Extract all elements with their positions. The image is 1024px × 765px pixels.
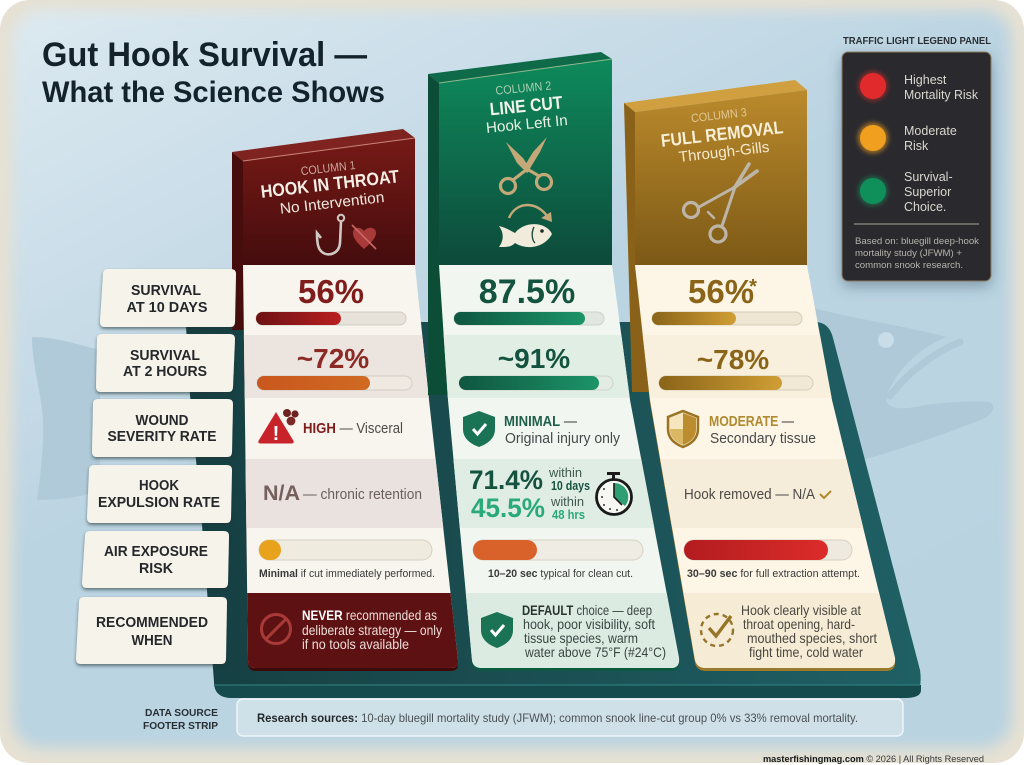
label: survival at 10 days: SURVIVAL — [131, 283, 201, 299]
icon: warning triangle with organs: ! — [273, 423, 279, 445]
icon: scissors — [500, 137, 552, 194]
label: air exposure risk — [82, 531, 229, 588]
hook expulsion: N/A: N/A — [263, 482, 300, 505]
label: wound severity rate — [92, 399, 233, 457]
icon: arrow over fish — [499, 205, 552, 247]
light: green: Choice. — [904, 200, 946, 214]
survival 2 hours: 78%: ~78% — [697, 344, 769, 375]
icon: stopwatch — [596, 472, 632, 514]
label: wound severity rate: WOUND — [136, 413, 188, 429]
wound severity: minimal — [463, 411, 620, 447]
recommended: visible hook — [701, 602, 877, 660]
survival 2 hours: 78% — [659, 344, 813, 390]
wound severity: moderate: MODERATE — — [709, 413, 794, 430]
footer strip label: FOOTER STRIP — [143, 720, 218, 732]
title: What the Science Shows — [42, 76, 385, 109]
hook expulsion: N/A: — chronic retention — [303, 486, 422, 503]
air exposure: 30-90 sec — [684, 540, 860, 580]
background fish tail — [32, 337, 100, 500]
label: hook expulsion rate — [87, 465, 232, 523]
row labels — [76, 269, 236, 664]
hook expulsion: rates: within — [548, 466, 582, 480]
air exposure: minimal: Minimal if cut immediately performed. — [259, 568, 435, 580]
wound severity: high — [259, 409, 403, 445]
footer strip label: DATA SOURCE — [145, 707, 218, 719]
label: recommended when: WHEN — [132, 633, 172, 649]
survival 10 days: 56%: 56% — [298, 273, 364, 310]
light: green: Survival- — [904, 170, 953, 184]
icon: dashed circle check — [701, 614, 733, 646]
column 1 header block: COLUMN 1 — [300, 158, 356, 178]
icon: green shield check — [481, 612, 513, 648]
panel: column 3 full removal — [624, 80, 910, 671]
column 2 body cells — [430, 265, 690, 671]
icon: fish hook with crossed heart — [317, 215, 376, 254]
label: survival at 2 hours — [96, 334, 235, 392]
hook expulsion: N/A — [263, 482, 422, 505]
column 3 body cells — [630, 265, 910, 671]
survival 2 hours: 91%: ~91% — [498, 343, 570, 374]
column 3 header block: Through-Gills — [678, 139, 770, 166]
copyright: masterfishingmag.com © 2026 | All Rights Reserved — [763, 754, 984, 765]
legend note: common snook research. — [855, 260, 963, 271]
hook expulsion: rates: 45.5% — [471, 493, 545, 523]
recommended: default: DEFAULT choice — deep — [522, 602, 652, 618]
label: survival at 2 hours: SURVIVAL — [130, 348, 200, 364]
hook expulsion: rates — [469, 465, 632, 523]
panel: traffic light legend — [842, 52, 991, 281]
light: red: Mortality Risk — [904, 88, 979, 102]
recommended: default: hook, poor visibility, soft — [523, 616, 655, 632]
column 1 body cells — [240, 265, 470, 671]
label: wound severity rate: SEVERITY RATE — [108, 429, 217, 445]
recommended: visible hook: fight time, cold water — [749, 644, 863, 660]
recommended: default — [481, 602, 666, 660]
survival 10 days: 56%*: 56% — [688, 273, 754, 310]
recommended: never: if no tools available — [302, 636, 409, 652]
column 2 header block: Hook Left In — [485, 112, 568, 137]
column 1 header block: No Intervention — [279, 189, 385, 218]
recommended: never: NEVER recommended as — [302, 607, 437, 623]
panel: column 2 line cut — [428, 52, 690, 671]
light: red: Highest — [904, 73, 947, 87]
label: survival at 10 days — [100, 269, 236, 327]
wound severity: minimal: Original injury only — [505, 430, 620, 447]
hook expulsion: rates: within — [550, 495, 584, 509]
label: survival at 10 days: AT 10 DAYS — [126, 300, 208, 316]
label: hook expulsion rate: EXPULSION RATE — [98, 495, 220, 511]
label: hook expulsion rate: HOOK — [139, 478, 179, 494]
air exposure: minimal — [259, 540, 435, 580]
survival 2 hours: 91% — [459, 343, 613, 390]
legend note: Based on: bluegill deep-hook — [855, 236, 979, 247]
recommended: visible hook: Hook clearly visible at — [741, 602, 861, 618]
label: recommended when: RECOMMENDED — [96, 615, 208, 631]
survival 10 days: 56%* — [652, 273, 802, 325]
air exposure: 30-90 sec: 30–90 sec for full extraction attempt. — [687, 568, 860, 580]
column 2 header block: LINE CUT — [489, 92, 563, 119]
label: air exposure risk: AIR EXPOSURE — [104, 544, 208, 560]
recommended: visible hook: throat opening, hard- — [743, 616, 855, 632]
light: red — [858, 71, 979, 102]
icon: gold half shield — [668, 411, 698, 447]
legend note — [855, 236, 979, 271]
column 1 header block — [232, 129, 415, 330]
hook expulsion: rates: 71.4% — [469, 465, 543, 495]
title — [42, 36, 385, 109]
air exposure: 10-20 sec: 10–20 sec typical for clean cut. — [488, 568, 633, 580]
recommended: never — [262, 607, 442, 652]
survival 10 days: 87.5%: 87.5% — [479, 273, 575, 311]
survival 2 hours: 72%: ~72% — [297, 343, 369, 374]
icon: hemostat forceps — [684, 164, 757, 242]
recommended: visible hook: mouthed species, short — [747, 630, 877, 646]
label: recommended when — [76, 597, 227, 664]
column 1 header block: HOOK IN THROAT — [260, 166, 400, 202]
column 3 header block: FULL REMOVAL — [660, 117, 784, 151]
survival 10 days: 56%*: * — [749, 276, 757, 298]
recommended: never: deliberate strategy — only — [302, 622, 442, 638]
label: air exposure risk: RISK — [139, 561, 174, 577]
wound severity: moderate — [668, 411, 816, 447]
recommended: default: tissue species, warm — [524, 630, 638, 646]
column 3 header block — [624, 80, 807, 392]
light: amber — [858, 122, 957, 154]
column 3 header block: COLUMN 3 — [690, 105, 748, 125]
wound severity: high: HIGH — Visceral — [303, 420, 403, 437]
wound severity: minimal: MINIMAL — — [504, 413, 577, 430]
light: amber: Risk — [904, 139, 929, 153]
light: amber: Moderate — [904, 124, 957, 138]
air exposure: 10-20 sec — [473, 540, 643, 580]
survival 2 hours: 72% — [257, 343, 412, 390]
light: green — [858, 170, 953, 214]
hook expulsion: removed: Hook removed — N/A — [684, 486, 815, 503]
legend heading: TRAFFIC LIGHT LEGEND PANEL — [843, 35, 992, 47]
label: survival at 2 hours: AT 2 HOURS — [123, 364, 207, 380]
light: green: Superior — [904, 185, 951, 199]
survival 10 days: 56% — [256, 273, 406, 325]
icon: prohibition sign — [262, 614, 290, 644]
column 2 header block — [428, 52, 612, 395]
icon: warning triangle with organs — [259, 409, 299, 445]
panel: column 1 hook in throat — [232, 129, 470, 671]
footer strip label — [143, 707, 218, 732]
footer strip — [237, 699, 903, 736]
background fish head — [800, 308, 993, 470]
title: Gut Hook Survival — — [42, 36, 367, 74]
survival 10 days: 87.5% — [454, 273, 604, 325]
column 2 header block: COLUMN 2 — [495, 78, 552, 98]
recommended: default: water above 75°F (#24°C) — [524, 644, 666, 660]
icon: green shield check — [463, 411, 495, 447]
legend note: mortality study (JFWM) + — [855, 248, 962, 259]
hook expulsion: rates: 10 days — [551, 479, 590, 493]
hook expulsion: rates: 48 hrs — [552, 508, 585, 522]
footer strip: Research sources: 10-day bluegill mortality study (JFWM); common snook line-cut group 0% vs 33% removal mortality. — [257, 711, 858, 725]
wound severity: moderate: Secondary tissue — [710, 430, 816, 447]
teal platform — [186, 322, 921, 698]
